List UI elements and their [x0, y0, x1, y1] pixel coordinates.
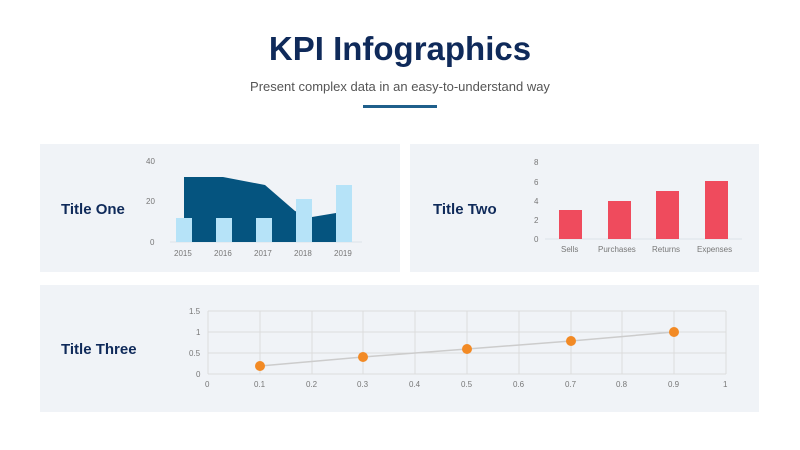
chart: scatter line: 1.5 [189, 307, 201, 316]
chart: scatter line: 1 [723, 380, 728, 389]
chart: scatter line: 0.1 [254, 380, 266, 389]
accent line [363, 105, 437, 108]
chart: scatter line: 0 [205, 380, 210, 389]
chart: scatter line: 0.5 [189, 349, 201, 358]
chart: area and bars: 2015 [174, 249, 192, 258]
title: KPI Infographics [269, 30, 531, 67]
chart: scatter line: 0.7 [565, 380, 577, 389]
chart: area and bars: 2019 [334, 249, 352, 258]
panel: title two [410, 144, 759, 272]
chart: scatter line: 0.2 [306, 380, 318, 389]
chart: red bars: 8 [534, 158, 539, 167]
chart: red bars: 6 [534, 178, 539, 187]
chart: red bars: Purchases [598, 245, 636, 254]
chart: area and bars: 40 [146, 157, 155, 166]
chart: red bars: Returns [652, 245, 680, 254]
chart: area and bars: 0 [150, 238, 155, 247]
chart: red bars: Expenses [697, 245, 732, 254]
chart: scatter line: 0.6 [513, 380, 525, 389]
subtitle: Present complex data in an easy-to-understand way [250, 79, 550, 94]
chart: scatter line: 0.4 [409, 380, 421, 389]
chart: red bars: 0 [534, 235, 539, 244]
chart: scatter line: 0.5 [461, 380, 473, 389]
chart: area and bars: 2017 [254, 249, 272, 258]
heading: title one: Title One [61, 201, 125, 218]
chart: red bars: Sells [561, 245, 578, 254]
chart: red bars: 4 [534, 197, 539, 206]
chart: area and bars: 2018 [294, 249, 312, 258]
heading: title three: Title Three [61, 341, 137, 358]
panel: title three [40, 285, 759, 412]
chart: scatter line: 0 [196, 370, 201, 379]
chart: scatter line: 1 [196, 328, 201, 337]
chart: scatter line: 0.8 [616, 380, 628, 389]
chart: red bars: 2 [534, 216, 539, 225]
chart: scatter line: 0.3 [357, 380, 369, 389]
chart: area and bars: 2016 [214, 249, 232, 258]
panel: title one [40, 144, 400, 272]
heading: title two: Title Two [433, 201, 497, 218]
chart: scatter line: 0.9 [668, 380, 680, 389]
chart: area and bars: 20 [146, 197, 155, 206]
